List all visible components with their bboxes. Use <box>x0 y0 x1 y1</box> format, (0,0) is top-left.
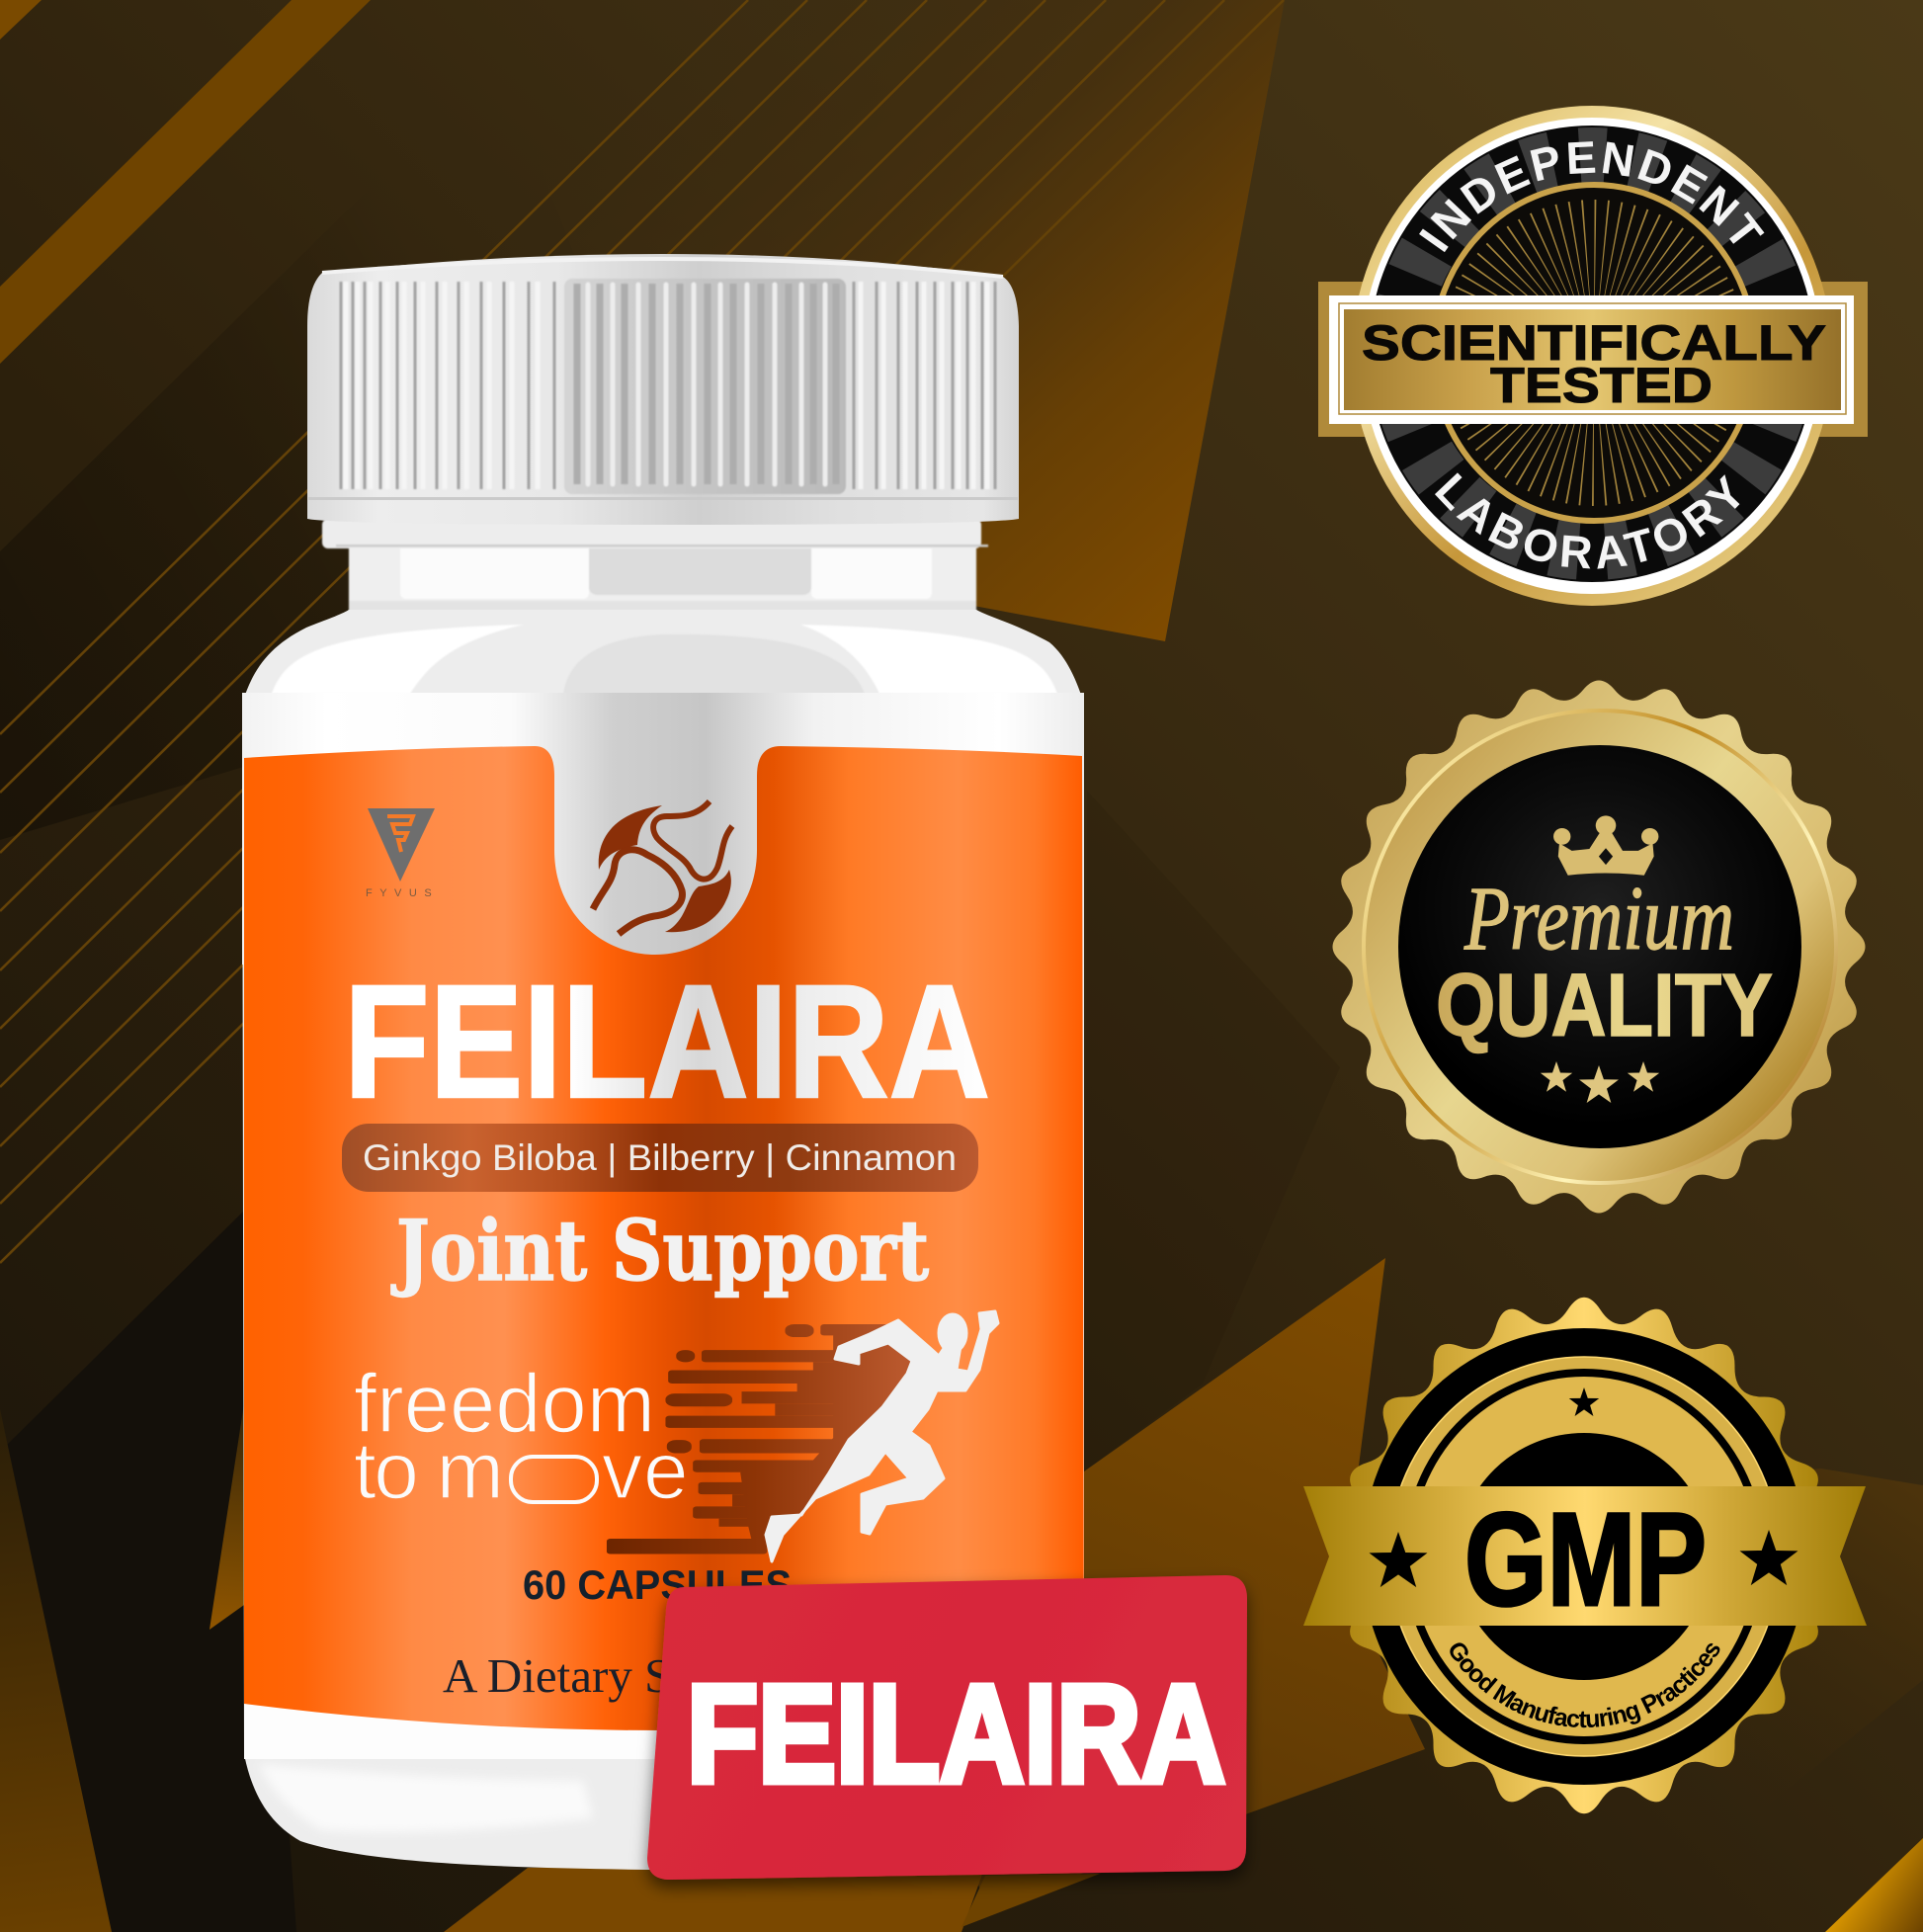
orange label <box>244 746 1084 1730</box>
badge: GMP good manufacturing practices <box>1303 1297 1867 1814</box>
badge: independent laboratory scientifically tested <box>1318 106 1868 606</box>
icon: FYVUS brand logo <box>366 808 439 899</box>
red name card: FEILAIRA <box>687 1655 1225 1811</box>
red name card <box>647 1575 1247 1880</box>
Premium script: Premium <box>1463 868 1734 968</box>
GMP letters: GMP <box>1464 1486 1707 1634</box>
three stars <box>1541 1061 1659 1103</box>
tagline: freedom to move: ve <box>602 1426 690 1516</box>
Joint Support heading: Joint Support <box>390 1202 929 1300</box>
capsule count: 60 CAPSULES <box>523 1561 792 1608</box>
arc text: independent: INDEPENDENT <box>1419 141 1765 253</box>
top star <box>1569 1387 1599 1416</box>
ingredients pill <box>342 1124 978 1192</box>
tagline: freedom to move: to m <box>354 1426 501 1516</box>
arc text: good manufacturing practices: Good Manufacturing Practices <box>1450 1642 1719 1727</box>
bottle neck <box>322 519 988 623</box>
arc text: laboratory: LABORATORY <box>1435 472 1739 569</box>
product name on bottle: FEILAIRA <box>344 951 990 1132</box>
product bottle <box>242 254 1084 1870</box>
QUALITY heading: QUALITY <box>1436 957 1773 1055</box>
speed bars graphic <box>607 1324 919 1554</box>
ribbon <box>1303 1486 1867 1626</box>
ingredients pill: Ginkgo Biloba | Bilberry | Cinnamon <box>363 1137 957 1178</box>
bottle body <box>242 610 1084 1870</box>
icon: crown <box>1553 815 1658 876</box>
ribbon stars <box>1370 1530 1798 1587</box>
badge: independent laboratory scientifically tested: TESTED <box>1490 358 1713 413</box>
tagline: freedom to move: freedom <box>354 1357 655 1450</box>
dietary supplement line: A Dietary Supplement <box>443 1648 877 1703</box>
bottle cap <box>307 254 1019 525</box>
banner text: SCIENTIFICALLY <box>1362 315 1826 371</box>
seal scallops <box>1339 1298 1829 1813</box>
badge: premium quality <box>1332 680 1866 1214</box>
icon: FYVUS brand logo: FYVUS <box>366 887 439 899</box>
icon: running figure <box>766 1311 998 1561</box>
tagline: freedom to move <box>354 1357 690 1516</box>
icon: joint logo <box>593 801 732 934</box>
